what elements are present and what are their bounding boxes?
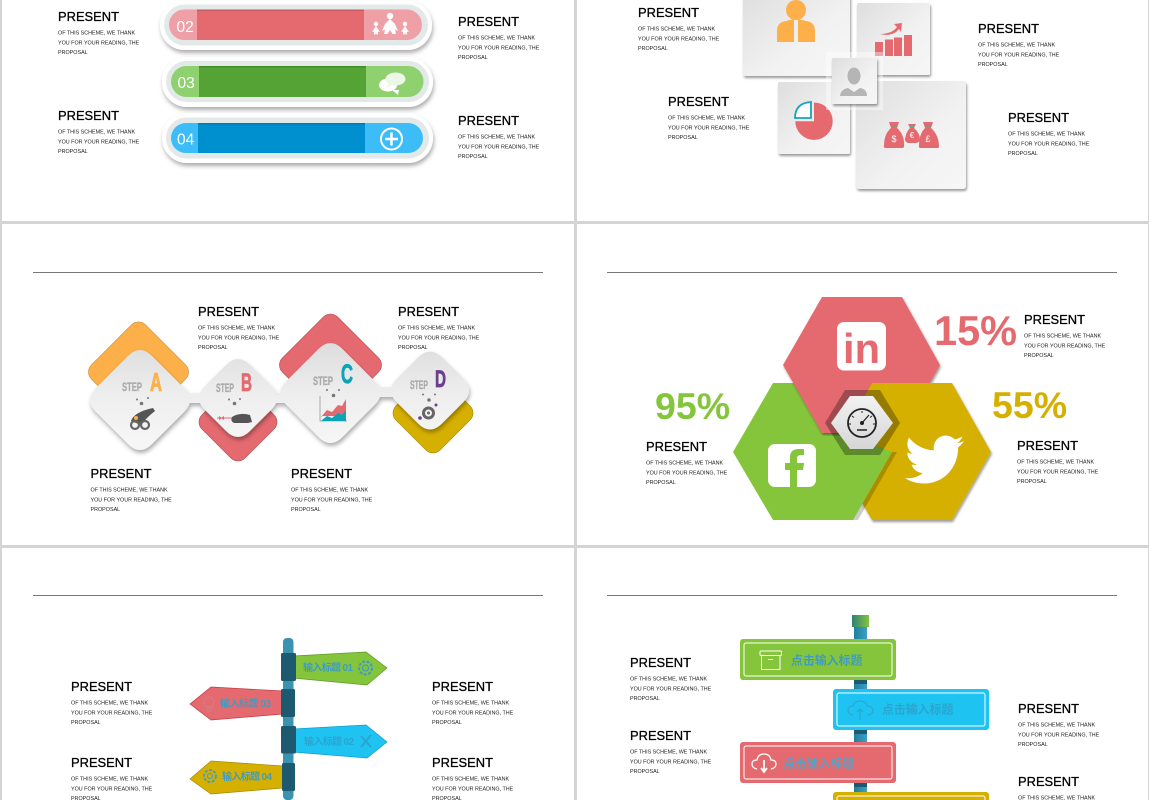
step C: STEP <box>313 376 333 388</box>
text block: present right 1: OF THIS SCHEME, WE THANK <box>432 700 509 706</box>
text block: present 2 <box>978 21 1060 68</box>
text block: present right 2: PRESENT <box>432 755 493 770</box>
text block: present right 2 <box>1018 774 1095 800</box>
card: center avatar <box>826 52 883 110</box>
text block: present 2: OF THIS SCHEME, WE THANK <box>978 42 1055 48</box>
text block: present facebook: PROPOSAL <box>646 480 676 486</box>
text block: present left 2: OF THIS SCHEME, WE THANK <box>71 776 148 782</box>
icon: money bags: € <box>910 131 915 140</box>
icon: gear cluster <box>418 404 438 420</box>
text block: present lower right: PROPOSAL <box>458 154 488 160</box>
icon: hand with arrow <box>217 414 252 423</box>
text block: present 3: PRESENT <box>668 94 729 109</box>
text block: present 4: OF THIS SCHEME, WE THANK <box>1008 132 1085 138</box>
box: blue title <box>833 689 989 730</box>
icon: cloud download <box>752 754 776 772</box>
capsule bar 02: 02 <box>176 19 194 36</box>
sign: yellow 04 <box>190 761 295 794</box>
text block: present facebook: PRESENT <box>646 439 707 454</box>
text block: present twitter: YOU FOR YOUR READING, THE <box>1017 470 1099 476</box>
text block: present lower 1 <box>90 466 172 513</box>
text block: present 3: PROPOSAL <box>668 135 698 141</box>
text block: present twitter: PRESENT <box>1017 438 1078 453</box>
text block: present lower left <box>58 108 140 155</box>
icon: flower gear <box>204 770 216 782</box>
text block: present right 2: PRESENT <box>1018 774 1079 789</box>
text block: present right 1: PRESENT <box>432 679 493 694</box>
text block: present top left: OF THIS SCHEME, WE THANK <box>58 30 135 36</box>
text block: present lower left: YOU FOR YOUR READING, THE <box>58 140 140 146</box>
capsule bar 03: 03 <box>178 75 195 92</box>
panel: signpost arrows <box>2 548 574 800</box>
text block: present left 2 <box>71 755 153 800</box>
text block: present left 1: PRESENT <box>630 655 691 670</box>
step B <box>216 369 252 423</box>
text block: present right 1: OF THIS SCHEME, WE THANK <box>1018 722 1095 728</box>
sign: green 01 <box>281 652 387 685</box>
box: blue title: 点击输入标题 <box>882 702 953 716</box>
icon: family <box>372 13 409 35</box>
text block: present linkedin: YOU FOR YOUR READING, THE <box>1024 344 1106 350</box>
box: yellow title <box>833 792 989 800</box>
hexagon cluster <box>733 297 991 520</box>
text block: present lower 2: PROPOSAL <box>291 507 321 513</box>
sign: blue 02 <box>281 725 387 758</box>
text block: present linkedin <box>1024 312 1106 359</box>
step B: B <box>241 369 252 397</box>
text block: present left 2: YOU FOR YOUR READING, THE <box>71 786 153 792</box>
sign: green 01: 输入标题 01 <box>303 661 353 674</box>
text block: present left 1: PRESENT <box>71 679 132 694</box>
step A: A <box>150 367 162 397</box>
text block: present 1: PRESENT <box>638 5 699 20</box>
text block: present lower 1: YOU FOR YOUR READING, THE <box>90 498 172 504</box>
text block: present left 1 <box>71 679 153 726</box>
box: green title: 点击输入标题 <box>791 654 862 668</box>
panel: social hexagons <box>577 224 1148 545</box>
text block: present left 2: OF THIS SCHEME, WE THANK <box>630 750 707 756</box>
box: red title: 点击输入标题 <box>783 756 854 770</box>
text block: present left 1: OF THIS SCHEME, WE THANK <box>71 700 148 706</box>
text block: present top right: OF THIS SCHEME, WE THANK <box>458 36 535 42</box>
text block: present lower left: OF THIS SCHEME, WE THANK <box>58 130 135 136</box>
text block: present lower right: OF THIS SCHEME, WE THANK <box>458 134 535 140</box>
stat: 95%: 95% <box>655 385 730 427</box>
icon: facebook <box>768 444 816 487</box>
step D <box>410 366 446 420</box>
icon: area chart <box>320 396 347 421</box>
text block: present right 1: PROPOSAL <box>1018 742 1048 748</box>
text block: present twitter <box>1017 438 1099 485</box>
icon: crossed tools <box>361 735 371 747</box>
text block: present 4: PRESENT <box>1008 110 1069 125</box>
text block: present facebook: YOU FOR YOUR READING, THE <box>646 470 728 476</box>
box: green title <box>740 639 896 680</box>
text block: present lower 1: OF THIS SCHEME, WE THANK <box>90 488 168 494</box>
text block: present upper 1: YOU FOR YOUR READING, THE <box>198 336 280 342</box>
text block: present top left <box>58 9 140 56</box>
sign: yellow 04: 输入标题 04 <box>222 770 272 783</box>
panel: step diamonds <box>2 224 574 545</box>
capsule bar 02 <box>160 1 432 50</box>
icon: plus circle <box>381 128 402 150</box>
icon: grey man <box>840 68 867 96</box>
text block: present right 2 <box>432 755 514 800</box>
text block: present top left: PRESENT <box>58 9 119 24</box>
sign: red 03 <box>190 687 295 720</box>
text block: present upper 1: PRESENT <box>198 304 259 319</box>
text block: present right 1: PRESENT <box>1018 701 1079 716</box>
text block: present lower 1: PROPOSAL <box>90 507 120 513</box>
text block: present lower right: YOU FOR YOUR READING, THE <box>458 144 540 150</box>
stat: 15%: 15% <box>934 307 1017 354</box>
icon: money bags: $ <box>891 134 897 144</box>
icon: pie <box>795 102 833 140</box>
text block: present lower 2: OF THIS SCHEME, WE THANK <box>291 488 368 494</box>
icon: cloud upload <box>848 701 873 720</box>
text block: present top right: PROPOSAL <box>458 55 488 61</box>
text block: present linkedin: PRESENT <box>1024 312 1085 327</box>
icon: money bags <box>884 122 939 148</box>
step A: STEP <box>122 382 142 394</box>
signpost pole <box>283 638 294 800</box>
text block: present right 1: YOU FOR YOUR READING, THE <box>1018 732 1100 738</box>
text block: present 2: YOU FOR YOUR READING, THE <box>978 52 1060 58</box>
text block: present 2: PROPOSAL <box>978 62 1008 68</box>
text block: present left 2: YOU FOR YOUR READING, THE <box>630 760 712 766</box>
step D: STEP <box>410 380 428 392</box>
icon: archive box <box>760 651 782 670</box>
text block: present lower 1: PRESENT <box>90 466 152 481</box>
icon: chat bubbles <box>379 72 406 95</box>
text block: present 2: PRESENT <box>978 21 1039 36</box>
text block: present right 1 <box>1018 701 1100 748</box>
step C <box>313 359 353 421</box>
text block: present left 1: YOU FOR YOUR READING, THE <box>71 710 153 716</box>
sign: red 03: 输入标题 03 <box>220 697 271 710</box>
text block: present left 1: OF THIS SCHEME, WE THANK <box>630 676 707 682</box>
step A <box>122 367 162 429</box>
colored diamonds behind <box>84 310 477 465</box>
text block: present facebook: OF THIS SCHEME, WE THANK <box>646 460 723 466</box>
text block: present 3 <box>668 94 750 141</box>
text block: present top right: PRESENT <box>458 14 519 29</box>
icon: gear outline <box>359 662 372 674</box>
capsule bar 04: 04 <box>177 132 195 148</box>
text block: present linkedin: OF THIS SCHEME, WE THANK <box>1024 334 1101 340</box>
text block: present right 1: PROPOSAL <box>432 720 462 726</box>
text block: present 4: PROPOSAL <box>1008 151 1038 157</box>
text block: present linkedin: PROPOSAL <box>1024 353 1054 359</box>
text block: present upper 2: PROPOSAL <box>398 345 428 351</box>
text block: present upper 2: PRESENT <box>398 304 459 319</box>
text block: present left 1: PROPOSAL <box>630 696 660 702</box>
text block: present upper 1 <box>198 304 280 351</box>
icon: money bags: £ <box>925 134 931 144</box>
text block: present upper 1: OF THIS SCHEME, WE THANK <box>198 326 275 332</box>
text block: present left 1 <box>630 655 712 702</box>
card: money bags <box>856 81 966 189</box>
center gauge hexagon <box>831 396 893 449</box>
step D: D <box>435 366 446 393</box>
card: growth chart <box>857 3 930 75</box>
stat: 55%: 55% <box>992 384 1067 426</box>
pole with cap <box>852 615 869 800</box>
text block: present top right: YOU FOR YOUR READING, THE <box>458 46 540 52</box>
text block: present 4: YOU FOR YOUR READING, THE <box>1008 142 1090 148</box>
text block: present top left: YOU FOR YOUR READING, THE <box>58 40 140 46</box>
panel: vertical signpost boxes <box>577 548 1148 800</box>
text block: present top left: PROPOSAL <box>58 50 88 56</box>
text block: present top right <box>458 14 540 61</box>
icon: bars and arrow <box>875 23 912 56</box>
text block: present upper 2: OF THIS SCHEME, WE THANK <box>398 326 475 332</box>
text block: present left 1: PROPOSAL <box>71 720 101 726</box>
text block: present lower 2: PRESENT <box>291 466 352 481</box>
text block: present left 2 <box>630 728 712 775</box>
box: red title <box>740 742 896 783</box>
text block: present right 2: YOU FOR YOUR READING, THE <box>432 786 514 792</box>
capsule bar 04 <box>162 113 433 163</box>
panel: square cards <box>577 0 1148 221</box>
text block: present twitter: OF THIS SCHEME, WE THANK <box>1017 460 1094 466</box>
text block: present right 1: YOU FOR YOUR READING, THE <box>432 710 514 716</box>
step C: C <box>341 359 353 389</box>
text block: present lower right <box>458 113 540 160</box>
step B: STEP <box>216 383 234 395</box>
text block: present lower 2: YOU FOR YOUR READING, THE <box>291 498 373 504</box>
text block: present 1 <box>638 5 720 52</box>
text block: present left 2: PRESENT <box>630 728 691 743</box>
text block: present upper 1: PROPOSAL <box>198 345 228 351</box>
icon: orange person <box>777 0 815 42</box>
text block: present lower 2 <box>291 466 373 513</box>
text block: present lower left: PROPOSAL <box>58 149 88 155</box>
text block: present right 1 <box>432 679 514 726</box>
card: person <box>743 0 850 76</box>
text block: present 1: YOU FOR YOUR READING, THE <box>638 36 720 42</box>
text block: present lower left: PRESENT <box>58 108 119 123</box>
sign: blue 02: 输入标题 02 <box>304 735 354 748</box>
capsule bar 03 <box>162 57 433 107</box>
icon: twitter bird <box>905 436 964 484</box>
text block: present 3: OF THIS SCHEME, WE THANK <box>668 116 745 122</box>
text block: present lower right: PRESENT <box>458 113 519 128</box>
text block: present facebook <box>646 439 728 486</box>
panel: capsule bars <box>2 0 574 221</box>
text block: present 3: YOU FOR YOUR READING, THE <box>668 126 750 132</box>
icon: wrench and gears <box>131 408 155 429</box>
text block: present left 1: YOU FOR YOUR READING, THE <box>630 686 712 692</box>
connected white diamonds <box>90 343 469 450</box>
text block: present 1: PROPOSAL <box>638 46 668 52</box>
text block: present right 2: OF THIS SCHEME, WE THANK <box>432 776 509 782</box>
text block: present upper 2 <box>398 304 480 351</box>
icon: light bulb <box>204 697 214 711</box>
text block: present 4 <box>1008 110 1090 157</box>
text block: present twitter: PROPOSAL <box>1017 479 1047 485</box>
text block: present upper 2: YOU FOR YOUR READING, THE <box>398 336 480 342</box>
icon: linkedin: in <box>843 325 880 372</box>
text block: present left 2: PROPOSAL <box>630 769 660 775</box>
text block: present 1: OF THIS SCHEME, WE THANK <box>638 26 715 32</box>
text block: present left 2: PRESENT <box>71 755 132 770</box>
card: pie chart <box>778 82 850 154</box>
